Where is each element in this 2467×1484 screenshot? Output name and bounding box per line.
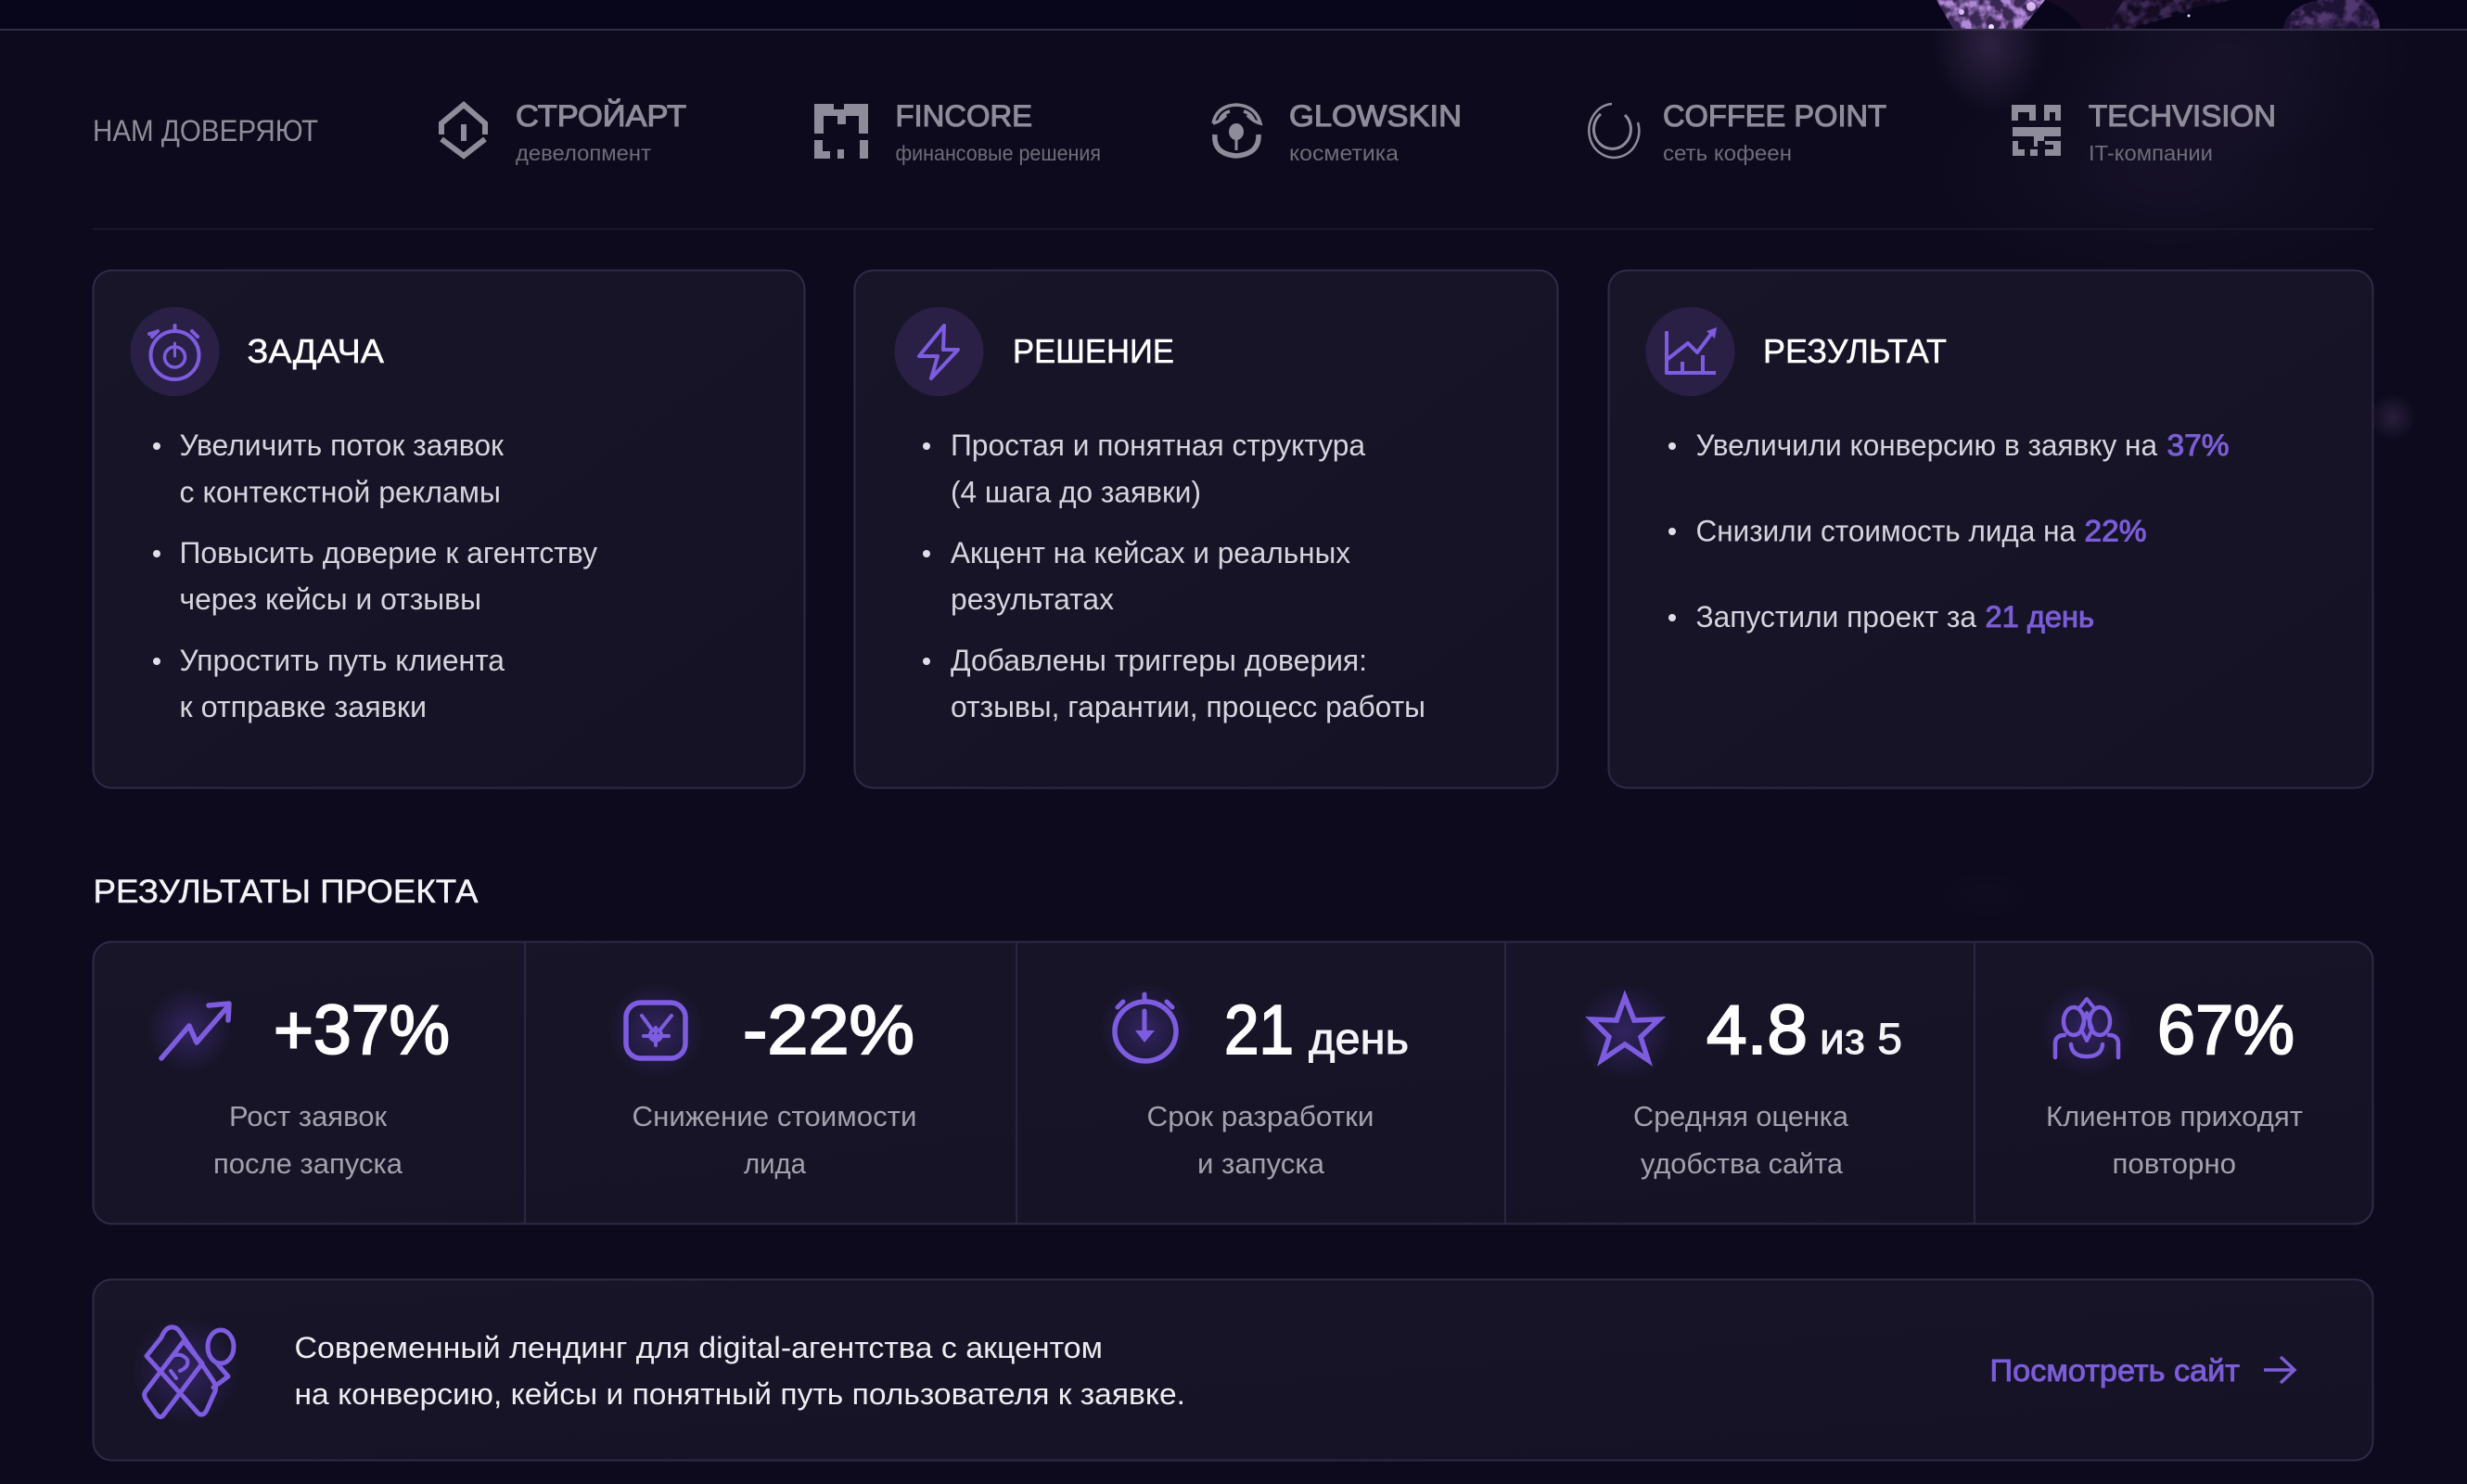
stat: -22%: лида xyxy=(744,1147,807,1180)
results list: 37% xyxy=(2167,429,2230,462)
stat: 67%: 67% xyxy=(2157,991,2294,1068)
icon: star xyxy=(1577,983,1673,1080)
logo: TECHVISION: IT-компании xyxy=(2089,141,2213,165)
logo: FINCORE: FINCORE xyxy=(896,99,1032,133)
task list: Увеличить поток заявок xyxy=(180,429,505,462)
icon: lightning xyxy=(894,307,983,396)
solution list: (4 шага до заявки) xyxy=(951,475,1201,508)
stat: 21 день: и запуска xyxy=(1197,1147,1325,1180)
panel: решение xyxy=(855,271,1558,788)
icon: tag square xyxy=(607,982,704,1079)
stat: +37%: +37% xyxy=(274,991,450,1068)
summary text: на конверсию, кейсы и понятный путь пользователя к заявке. xyxy=(295,1377,1185,1411)
panel: результат xyxy=(1608,271,2372,788)
task list: с контекстной рекламы xyxy=(180,475,501,508)
task list: Повысить доверие к агентству xyxy=(180,536,597,569)
logo strip: trusted by xyxy=(93,99,2276,165)
summary text xyxy=(295,1331,1185,1411)
solution list: отзывы, гарантии, процесс работы xyxy=(951,690,1425,723)
stat: 4.8 из 5 xyxy=(1577,983,1902,1180)
logo: FINCORE: финансовые решения xyxy=(896,141,1101,165)
stat: -22%: Снижение стоимости xyxy=(633,1100,916,1132)
heading: ЗАДАЧА xyxy=(247,332,384,370)
panel: project stats xyxy=(93,942,2372,1224)
solution list xyxy=(923,429,1425,723)
results list: Снизили стоимость лида на xyxy=(1695,514,2076,547)
heading: РЕШЕНИЕ xyxy=(1013,332,1174,370)
logo: COFFEE POINT: COFFEE POINT xyxy=(1663,99,1886,133)
solution list: Акцент на кейсах и реальных xyxy=(951,536,1350,569)
logo: GLOWSKIN xyxy=(1213,99,1462,165)
results list xyxy=(1668,429,2230,633)
results list: 22% xyxy=(2085,514,2146,547)
stat: +37%: Рост заявок xyxy=(229,1100,387,1132)
logo: TECHVISION: TECHVISION xyxy=(2089,99,2276,133)
logo: GLOWSKIN: косметика xyxy=(1289,141,1399,165)
logo: COFFEE POINT: сеть кофеен xyxy=(1663,141,1792,165)
stat: -22% xyxy=(607,982,916,1180)
icon: returning clients xyxy=(2040,983,2133,1076)
panel: summary with link xyxy=(93,1280,2372,1460)
stat: -22%: -22% xyxy=(743,991,914,1068)
icon: growth chart xyxy=(1645,307,1734,396)
arrow xyxy=(2264,1357,2294,1383)
purple smear under header xyxy=(1920,0,2421,923)
solution list: Простая и понятная структура xyxy=(951,429,1365,462)
lead label: НАМ ДОВЕРЯЮТ xyxy=(93,114,318,147)
panel: задача xyxy=(93,271,805,788)
task list: Упростить путь клиента xyxy=(180,644,505,677)
stat: 67%: Клиентов приходят xyxy=(2046,1100,2303,1132)
logo: GLOWSKIN: GLOWSKIN xyxy=(1289,99,1462,133)
summary text: Современный лендинг для digital-агентства с акцентом xyxy=(295,1331,1103,1364)
logo: COFFEE POINT xyxy=(1589,99,1886,165)
icon: crossed tools xyxy=(132,1317,239,1425)
task list xyxy=(153,429,597,723)
stat: 21 день: Срок разработки xyxy=(1146,1100,1374,1132)
decorative purple glow xyxy=(1937,0,2380,29)
task list: к отправке заявки xyxy=(180,690,427,723)
stat: 4.8 из 5: из 5 xyxy=(1820,1014,1902,1063)
logo: FINCORE xyxy=(814,99,1101,165)
stat: 21 день: 21 xyxy=(1224,991,1294,1068)
stat: 21 день xyxy=(1099,983,1409,1180)
results list: Запустили проект за xyxy=(1695,600,1976,633)
results list: 21 день xyxy=(1985,600,2094,633)
icon: stopwatch xyxy=(1099,983,1192,1076)
stat: 4.8 из 5: удобства сайта xyxy=(1641,1147,1844,1180)
icon: stopwatch xyxy=(130,307,219,396)
stat: 4.8 из 5: 4.8 xyxy=(1706,991,1808,1068)
stat: +37% xyxy=(147,987,450,1180)
logo: СТРОЙАРТ xyxy=(441,99,686,165)
logo: СТРОЙАРТ: девелопмент xyxy=(516,141,651,165)
task list: через кейсы и отзывы xyxy=(180,582,481,616)
stat: 21 день: день xyxy=(1309,1014,1409,1063)
logo: TECHVISION xyxy=(2012,99,2276,165)
logo: СТРОЙАРТ: СТРОЙАРТ xyxy=(516,99,686,133)
solution list: результатах xyxy=(951,582,1114,616)
results list: Увеличили конверсию в заявку на xyxy=(1695,429,2157,462)
section heading: РЕЗУЛЬТАТЫ ПРОЕКТА xyxy=(93,874,479,910)
stat: 67% xyxy=(2040,983,2303,1180)
solution list: Добавлены триггеры доверия: xyxy=(951,644,1367,677)
heading: РЕЗУЛЬТАТ xyxy=(1763,332,1947,370)
icon: rising arrow xyxy=(147,987,232,1072)
stat: 67%: повторно xyxy=(2113,1147,2236,1180)
stat: 4.8 из 5: Средняя оценка xyxy=(1633,1100,1849,1132)
stat: +37%: после запуска xyxy=(213,1147,403,1180)
link with arrow: Посмотреть сайт xyxy=(1990,1353,2240,1388)
